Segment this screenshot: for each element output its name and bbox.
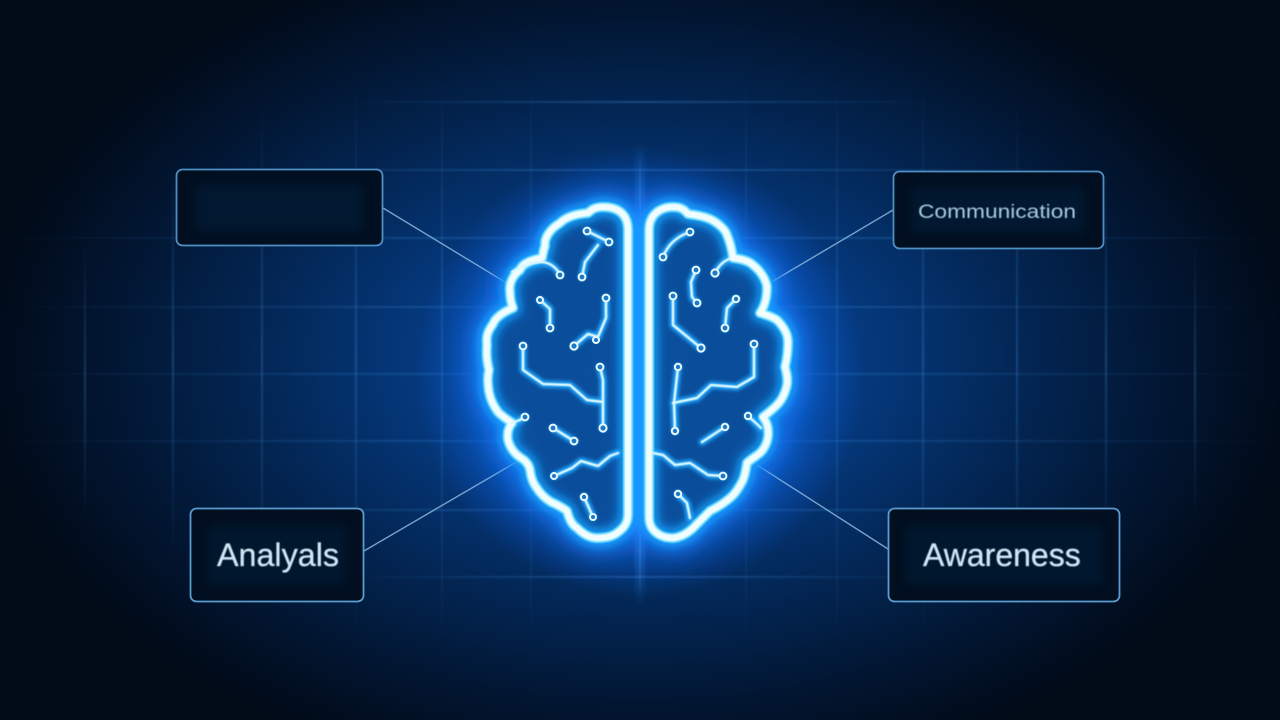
outer blue glow [487,207,788,538]
box: Communication [894,172,1104,248]
hemisphere inner glow [487,207,788,538]
label: Awareness: Awareness [923,537,1081,573]
circuit traces [511,231,761,518]
circuit glow [511,231,761,518]
inner hemisphere tint [487,207,788,538]
box: top left (empty) [176,170,382,246]
central glow line [635,140,645,610]
icon: neon circuit brain [487,207,788,538]
box: Awareness [888,508,1120,602]
brain halo [415,147,865,597]
label: Communication: Communication [918,202,1076,223]
box: Analyals [190,508,364,602]
circuit nodes [520,228,757,520]
hemisphere outline [487,207,788,538]
label: Analyals: Analyals [217,537,339,573]
connector lines [364,208,893,551]
